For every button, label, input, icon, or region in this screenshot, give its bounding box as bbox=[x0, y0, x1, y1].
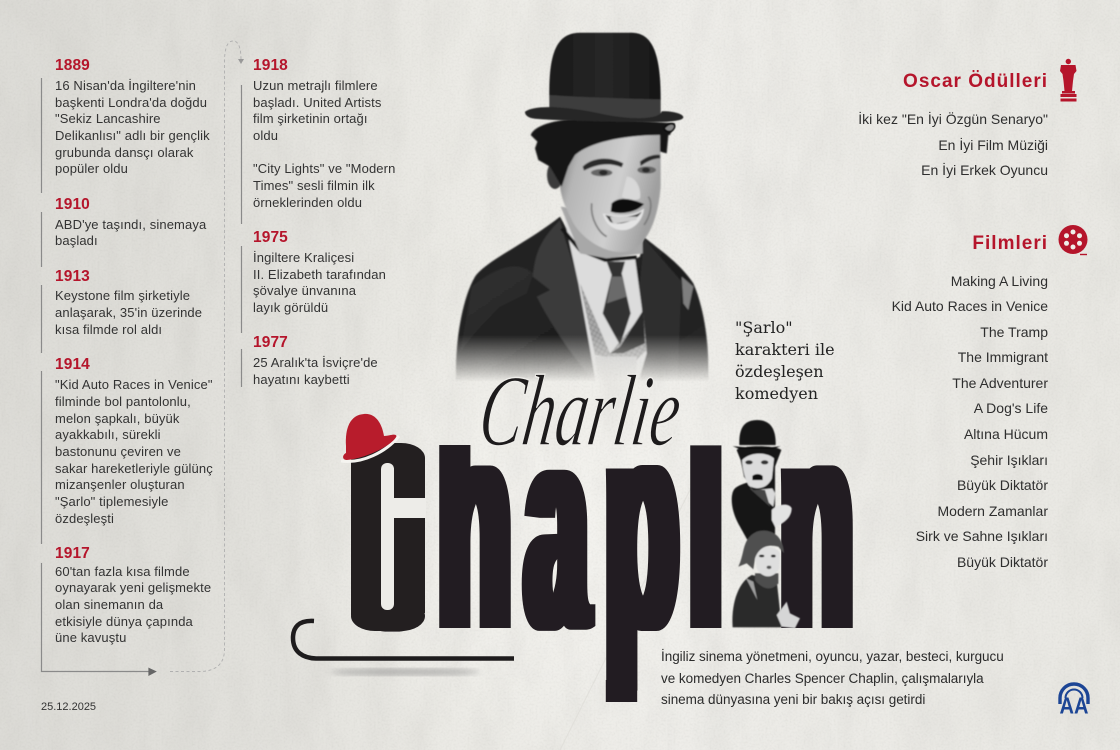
Oscar item 3: En İyi Erkek Oyuncu bbox=[921, 162, 1048, 178]
text 1918: Uzun metrajlı filmlere başladı. United Artists film şirketinin ortağı oldu "City Lights" ve "Modern Times" sesli filmin ilk örneklerinden oldu bbox=[253, 78, 395, 210]
logo: Anadolu Agency: AA bbox=[1060, 692, 1088, 718]
year 1910: 1910 bbox=[55, 196, 90, 212]
text 1889: 16 Nisan'da İngiltere'nin başkenti Londra'da doğdu "Sekiz Lancashire Delikanlısı" adlı bir gençlik grubunda dansçı olarak popüler oldu bbox=[55, 78, 210, 176]
red bowler hat icon bbox=[341, 414, 399, 461]
year 1977: 1977 bbox=[253, 334, 288, 351]
small photo: Chaplin and the Kid bbox=[732, 420, 800, 628]
year 1917: 1917 bbox=[55, 545, 90, 562]
script word: Charlie: Charlie bbox=[473, 354, 688, 467]
text 1913: Keystone film şirketiyle anlaşarak, 35'in üzerinde kısa filmde rol aldı bbox=[55, 288, 202, 337]
text 1975: İngiltere Kraliçesi II. Elizabeth tarafından şövalye ünvanına layık görüldü bbox=[253, 250, 386, 315]
letter C: C bbox=[355, 390, 424, 686]
year 1889: 1889 bbox=[55, 57, 90, 74]
letter h: h bbox=[438, 354, 511, 693]
year 1975: 1975 bbox=[253, 229, 288, 246]
logo: Anadolu Agency bbox=[1060, 684, 1088, 718]
description: İngiliz sinema yönetmeni, oyuncu, yazar, besteci, kurgucu ve komedyen Charles Spencer Chaplin, çalışmalarıyla sinema dünyasına yeni bir bakış açısı getirdi bbox=[661, 649, 1004, 707]
letter C ink corrections bbox=[351, 443, 426, 631]
film list: Making A Living Kid Auto Races in Venice The Tramp The Immigrant The Adventurer A Dog's Life Altına Hücum Şehir Işıkları Büyük Diktatör Modern Zamanlar Sirk ve Sahne Işıkları Büyük Diktatör bbox=[892, 272, 1048, 570]
rest of letters bbox=[439, 445, 853, 702]
walking cane bbox=[293, 621, 514, 676]
text 1910: ABD'ye taşındı, sinemaya başladı bbox=[55, 217, 206, 248]
timeline column 1 bbox=[55, 57, 213, 645]
letter a: a bbox=[526, 363, 588, 692]
portrait photo of Chaplin bbox=[456, 33, 708, 387]
tagline: "Şarlo" karakteri ile özdeşleşen komedyen bbox=[735, 318, 835, 403]
heading: Films: Filmleri bbox=[972, 233, 1048, 254]
timeline column 2 bbox=[253, 57, 395, 387]
Oscar item 1: İki kez "En İyi Özgün Senaryo" bbox=[858, 111, 1048, 127]
text 1977: 25 Aralık'ta İsviçre'de hayatını kaybetti bbox=[253, 355, 378, 387]
date: 25.12.2025 bbox=[41, 701, 96, 713]
year 1913: 1913 bbox=[55, 268, 90, 284]
year 1914: 1914 bbox=[55, 356, 90, 373]
letter p: p bbox=[606, 354, 678, 693]
letter n: n bbox=[780, 354, 853, 693]
letter l: l bbox=[690, 400, 722, 682]
big title: Chaplin bbox=[380, 374, 853, 702]
icon: Oscar statuette bbox=[1060, 59, 1076, 102]
letter p descender extension bbox=[613, 680, 630, 702]
text 1914: "Kid Auto Races in Venice" filminde bol pantolonlu, melon şapkalı, büyük ayakkabılı, sürekli bastonunu çeviren ve sakar hareketleriyle gülünç mizanşenler oluşturan "Şarlo" tiplemesiyle özdeşleşti bbox=[55, 377, 213, 526]
heading: Oscar: Oscar Ödülleri bbox=[903, 71, 1048, 92]
year 1918: 1918 bbox=[253, 57, 288, 74]
timeline connector lines bbox=[42, 41, 244, 675]
icon: film reel bbox=[1058, 225, 1088, 254]
text 1917: 60'tan fazla kısa filmde oynayarak yeni gelişmekte olan sinemanın da etkisiyle dünya çapında üne kavuştu bbox=[55, 564, 211, 645]
Oscar list bbox=[858, 111, 1048, 178]
Oscar item 2: En İyi Film Müziği bbox=[938, 137, 1048, 153]
